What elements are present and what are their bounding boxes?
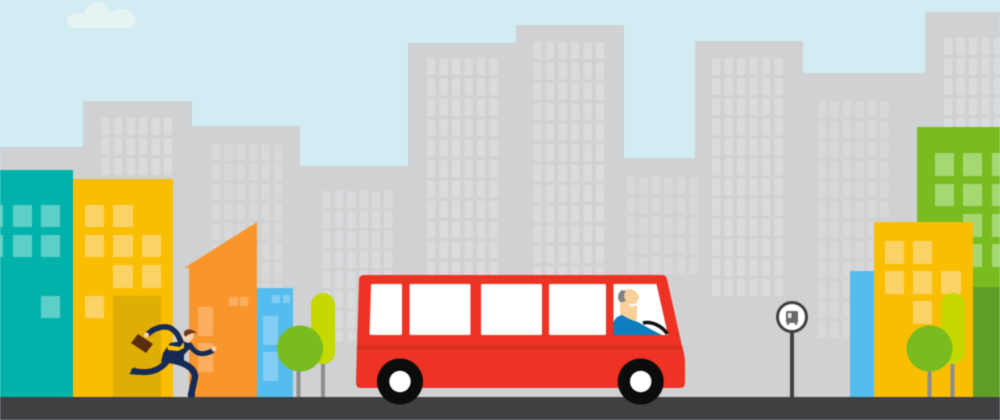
bus windows (370, 284, 668, 335)
tree: round right (906, 326, 952, 397)
tree: lime right (941, 293, 965, 397)
icon: cloud (67, 2, 136, 28)
bus stripe (357, 346, 683, 350)
front wheel (377, 358, 423, 404)
icon: bus (786, 311, 798, 325)
steering wheel (643, 323, 668, 334)
head (182, 330, 194, 342)
smile (628, 302, 638, 307)
shirt (614, 315, 662, 335)
front leg (170, 360, 195, 395)
road (0, 397, 1000, 420)
bus body (356, 275, 685, 388)
green building right (917, 127, 1000, 397)
neck and face (620, 289, 639, 323)
orange building (184, 222, 257, 397)
briefcase (131, 334, 153, 353)
blue building left (257, 288, 293, 397)
hands (144, 332, 149, 338)
bus driver (614, 289, 668, 335)
back arm (148, 327, 182, 344)
yellow building with door (73, 179, 173, 397)
bus stop sign (778, 302, 806, 398)
tree: round left (277, 326, 323, 397)
red bus (356, 275, 685, 404)
blue building right (850, 271, 874, 397)
torso (161, 341, 193, 363)
tie (167, 342, 184, 351)
tree: lime left (311, 293, 335, 397)
back leg (134, 360, 168, 372)
teal building (0, 170, 73, 397)
yellow building right (874, 222, 973, 397)
hair (618, 290, 626, 302)
front arm (190, 345, 212, 354)
hair (184, 329, 197, 337)
rear wheel (618, 358, 664, 404)
running businessman (129, 327, 216, 397)
